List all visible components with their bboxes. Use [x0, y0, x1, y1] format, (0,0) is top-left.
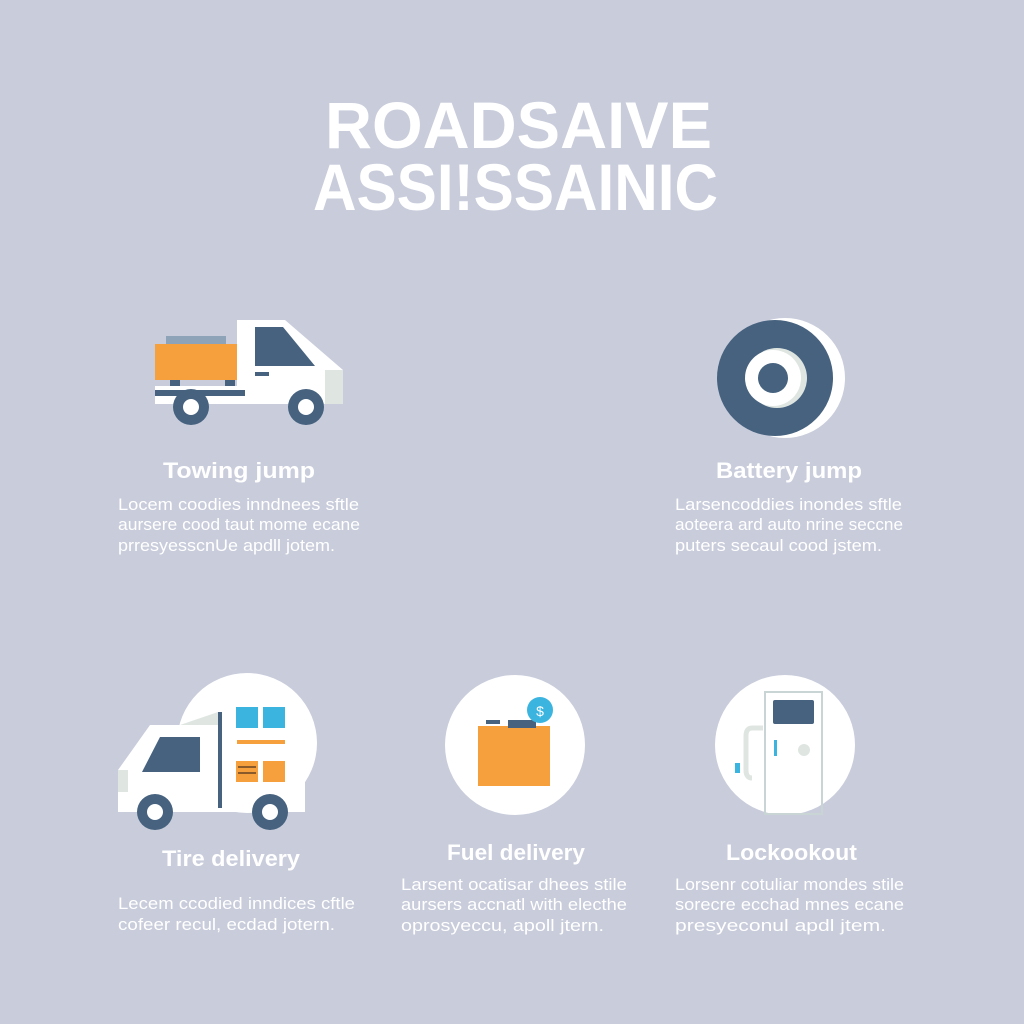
text block: tire delivery: Lecem ccodied inndices cftle	[118, 895, 355, 913]
text block: tire delivery: Tire delivery	[162, 846, 301, 871]
icon: tire delivery van	[118, 673, 317, 830]
text block: fuel delivery: oprosyeccu, apoll jtern.	[401, 917, 604, 935]
text block: lockout: sorecre ecchad mnes ecane	[675, 896, 904, 914]
text block: fuel delivery	[401, 840, 627, 935]
text block: towing: Locem coodies inndnees sftle	[118, 496, 359, 514]
text block: towing: Towing jump	[163, 458, 315, 483]
icon: lockout door	[715, 675, 855, 815]
icon: battery tire	[717, 318, 845, 438]
text block: battery: Larsencoddies inondes sftle	[675, 496, 902, 514]
text block: fuel delivery: Fuel delivery	[447, 840, 586, 865]
text block: fuel delivery: Larsent ocatisar dhees stile	[401, 876, 627, 894]
text block: battery: Battery jump	[716, 458, 862, 483]
text block: tire delivery: cofeer recul, ecdad jotern.	[118, 916, 335, 934]
icon: fuel delivery	[445, 675, 585, 815]
text block: lockout: Lockookout	[726, 840, 858, 865]
text block: lockout: presyeconul apdl jtem.	[675, 917, 886, 935]
text block: battery: puters secaul cood jstem.	[675, 537, 882, 555]
text block: towing: aursere cood taut mome ecane	[118, 516, 360, 534]
title: ROADSAIVE	[325, 88, 712, 162]
icon: fuel delivery: $	[536, 703, 544, 719]
text block: fuel delivery: aursers accnatl with electhe	[401, 896, 627, 914]
text block: lockout	[675, 840, 904, 935]
text block: towing: prresyesscnUe apdll jotem.	[118, 537, 335, 555]
text block: battery	[675, 458, 903, 555]
icon: tow truck	[155, 320, 343, 425]
title: ASSI!SSAINIC	[313, 150, 718, 224]
text block: battery: aoteera ard auto nrine seccne	[675, 516, 903, 534]
text block: towing	[118, 458, 360, 555]
text block: tire delivery	[118, 846, 355, 934]
text block: lockout: Lorsenr cotuliar mondes stile	[675, 876, 904, 894]
title	[313, 88, 718, 224]
